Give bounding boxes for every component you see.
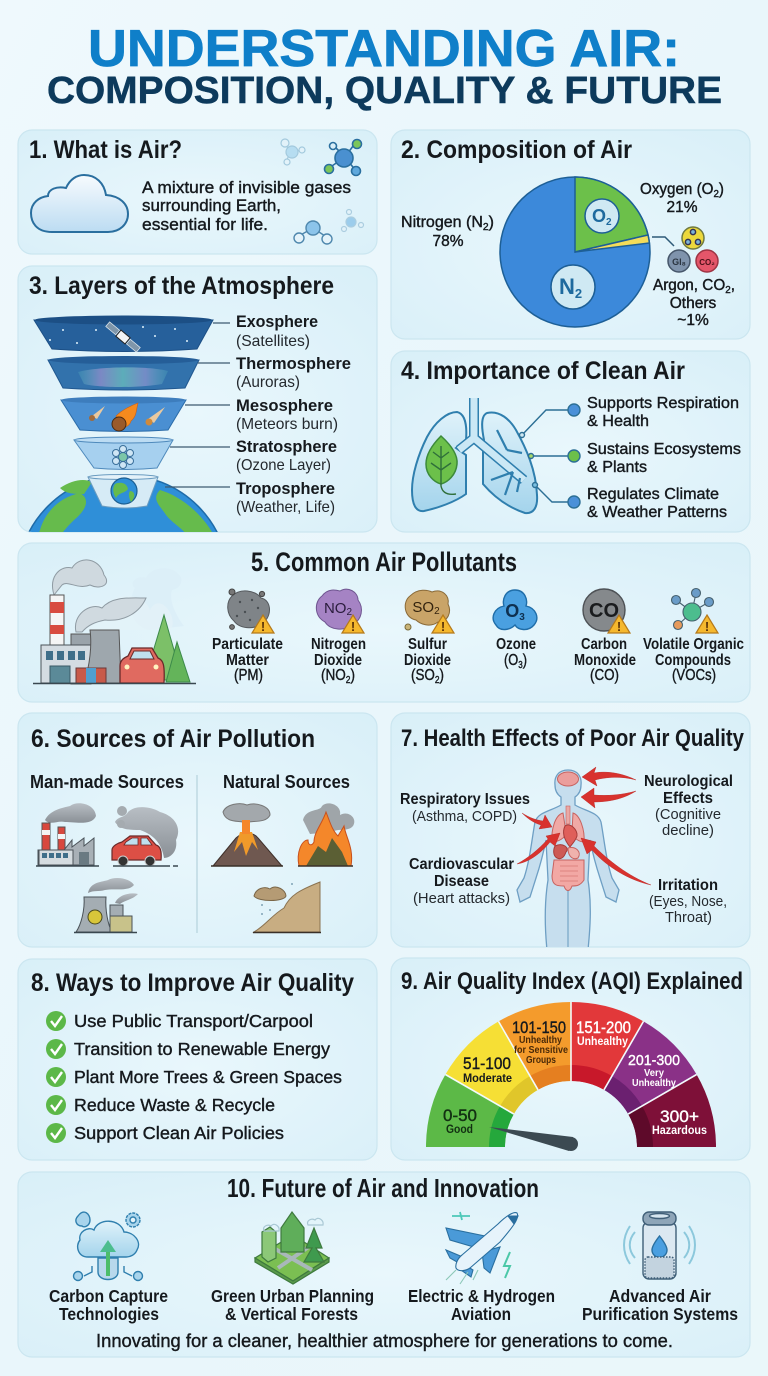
label: ozone: (O [504, 652, 522, 669]
pie chart [500, 177, 650, 327]
label: carbon monoxide: Carbon [581, 636, 627, 653]
icon: wildfire [298, 803, 354, 866]
icon: lungs [412, 398, 537, 513]
gauge label: hazardous [652, 1107, 707, 1137]
list item: public transport: Use Public Transport/Carpool [74, 1011, 313, 1031]
label: carbon capture: Carbon Capture [49, 1286, 168, 1306]
gauge label: sensitive groups [512, 1018, 568, 1066]
icon: power plant [74, 878, 138, 932]
panel: common air pollutants [18, 543, 750, 702]
list: importance items: & Health [587, 413, 649, 430]
label: nitrogen dioxide: 2 [346, 675, 351, 686]
label: ozone [496, 636, 536, 671]
gauge label: sensitive groups: 101-150 [512, 1018, 566, 1037]
icon: nitrogen dioxide: ! [351, 619, 355, 634]
gauge label: good: Good [446, 1122, 473, 1136]
label: neurological effects: Effects [663, 790, 713, 807]
label: sulfur dioxide [404, 636, 451, 686]
icon: carbon monoxide [583, 589, 630, 634]
panel: health effects [391, 713, 750, 950]
label: other gases: Argon, CO [653, 277, 726, 294]
label: cardiovascular disease [409, 856, 514, 907]
label: VOCs: Volatile Organic [643, 636, 744, 653]
icon: ozone: 3 [519, 612, 525, 623]
label: carbon capture: Technologies [59, 1304, 159, 1324]
heading: layers: 3. Layers of the Atmosphere [29, 272, 334, 300]
icon: molecules [281, 139, 364, 244]
gauge label: sensitive groups: Groups [526, 1054, 556, 1066]
label: respiratory issues: (Asthma, COPD) [412, 808, 517, 825]
labels: stratosphere [236, 437, 337, 474]
label: oxygen: Oxygen (O [640, 181, 715, 198]
label: other gases: ~1% [677, 312, 709, 329]
list item: renewable energy: Transition to Renewable Energy [74, 1039, 330, 1059]
label: air purification: Advanced Air [609, 1286, 711, 1306]
label: cardiovascular disease: (Heart attacks) [413, 890, 510, 907]
label: aviation: Aviation [451, 1304, 511, 1324]
list: importance items: Supports Respiration [587, 395, 739, 412]
label: respiratory issues [400, 791, 530, 825]
gauge label: moderate: Moderate [463, 1071, 512, 1085]
labels: thermosphere: Thermosphere [236, 354, 351, 373]
arrows: health effects [517, 767, 651, 885]
text: air definition: A mixture of invisible gases [142, 178, 351, 197]
layer: mesosphere [61, 396, 186, 432]
label: respiratory issues: Respiratory Issues [400, 791, 530, 808]
gauge label: hazardous: Hazardous [652, 1123, 707, 1137]
label: ozone: Ozone [496, 636, 536, 653]
label: particulate matter [212, 636, 283, 684]
label: other gases: 2 [725, 285, 731, 296]
badge: N2: 2 [575, 286, 582, 301]
label: carbon monoxide: (CO) [590, 667, 619, 684]
label: cardiovascular disease: Cardiovascular [409, 856, 514, 873]
heading: sources: 6. Sources of Air Pollution [31, 725, 315, 753]
label: green urban planning: & Vertical Forests [225, 1304, 358, 1324]
label: nitrogen dioxide: Nitrogen [311, 636, 366, 653]
text: air definition: surrounding Earth, [142, 196, 281, 215]
icon: cloud [31, 175, 128, 232]
label: other gases [653, 277, 735, 329]
icon: VOCs [672, 588, 718, 634]
badge: O2: O [592, 206, 606, 226]
label: oxygen: 21% [666, 199, 698, 216]
illustration: human body [517, 770, 619, 950]
label: sulfur dioxide: (SO [411, 667, 439, 684]
icon: ozone: O [505, 601, 519, 621]
label: nitrogen: Nitrogen (N [401, 214, 480, 231]
label: neurological effects [644, 773, 733, 839]
icon: trace gases: Gl₈ [672, 257, 686, 267]
label: nitrogen dioxide: Dioxide [314, 652, 362, 669]
labels: thermosphere: (Auroras) [236, 374, 300, 391]
icon: VOCs: ! [705, 619, 709, 634]
label: neurological effects: Neurological [644, 773, 733, 790]
list: importance items: & Plants [587, 459, 647, 476]
illustration: factory scene [33, 560, 196, 684]
illustration: earth [28, 480, 218, 532]
label: particulate matter: Particulate [212, 636, 283, 653]
title [47, 20, 722, 112]
label: sulfur dioxide: 2 [435, 675, 440, 686]
gauge label: very unhealthy: Unhealthy [632, 1077, 676, 1089]
label: VOCs [643, 636, 744, 684]
subheading: man-made: Man-made Sources [30, 772, 184, 792]
label: irritation: Throat) [665, 909, 712, 926]
title: COMPOSITION, QUALITY & FUTURE [47, 70, 722, 112]
layer: exosphere [34, 316, 213, 353]
gauge label: unhealthy: Unhealthy [577, 1034, 628, 1048]
gauge chart [426, 1002, 716, 1147]
label: ozone: 3 [518, 660, 523, 671]
labels: stratosphere: (Ozone Layer) [236, 457, 331, 474]
panel: importance of clean air [391, 351, 750, 532]
gauge label: sensitive groups: Unhealthy [519, 1034, 562, 1046]
label: nitrogen: 2 [483, 222, 489, 233]
icon: air purifier [624, 1212, 695, 1279]
labels: troposphere [236, 479, 335, 516]
gauge label: very unhealthy: Very [644, 1067, 664, 1079]
label: sulfur dioxide: Dioxide [404, 652, 451, 669]
labels: exosphere: (Satellites) [236, 333, 310, 350]
gauge label: good [443, 1106, 477, 1136]
badge: N2 [551, 265, 595, 309]
list: importance items [587, 395, 741, 521]
label: green urban planning [211, 1286, 374, 1324]
label: air purification [582, 1286, 738, 1324]
list item: clean air policies: Support Clean Air Policies [74, 1123, 284, 1143]
label: aviation [408, 1286, 555, 1324]
label: oxygen: 2 [713, 189, 719, 200]
label: irritation: (Eyes, Nose, [649, 893, 727, 910]
icon: dust landslide [253, 882, 321, 932]
label: carbon monoxide [574, 636, 636, 684]
label: nitrogen dioxide: ) [350, 667, 355, 684]
panel: sources of air pollution [18, 713, 377, 947]
gauge label: unhealthy [576, 1018, 631, 1048]
labels: stratosphere: Stratosphere [236, 437, 337, 456]
icon: carbon monoxide: CO [589, 600, 619, 622]
icon: sulfur dioxide: 2 [434, 606, 440, 617]
heading: what is air: 1. What is Air? [29, 136, 182, 164]
label: oxygen [640, 181, 724, 216]
gauge label: moderate: 51-100 [463, 1054, 511, 1073]
gauge label: very unhealthy [628, 1052, 680, 1089]
label: nitrogen: ) [489, 214, 494, 231]
list item: plant trees: Plant More Trees & Green Spaces [74, 1067, 342, 1087]
label: VOCs: (VOCs) [672, 667, 716, 684]
panel: ways to improve air quality [18, 959, 377, 1160]
label: other gases: Others [670, 295, 717, 312]
label: VOCs: Compounds [655, 652, 731, 669]
labels: troposphere: (Weather, Life) [236, 499, 335, 516]
icon: nitrogen dioxide [316, 589, 364, 634]
badge: O2 [585, 199, 619, 233]
list item: reduce waste: Reduce Waste & Recycle [74, 1095, 275, 1115]
title: UNDERSTANDING AIR: [88, 20, 680, 78]
icon: car with exhaust [112, 806, 178, 866]
label: green urban planning: Green Urban Planning [211, 1286, 374, 1306]
label: particulate matter: Matter [226, 652, 269, 669]
label: nitrogen dioxide: (NO [321, 667, 350, 684]
icon: carbon capture [74, 1212, 142, 1280]
icon: particulate matter [228, 589, 274, 634]
icon: trace gases [652, 227, 718, 272]
gauge label: moderate [463, 1054, 512, 1085]
icon: factory [36, 803, 99, 866]
icon: sulfur dioxide: ! [441, 619, 445, 634]
panel: layers of the atmosphere [18, 265, 378, 533]
leader lines [165, 323, 230, 487]
label: nitrogen dioxide [311, 636, 366, 686]
labels: exosphere: Exosphere [236, 312, 318, 331]
label: nitrogen: 78% [432, 233, 464, 250]
gauge label: good: 0-50 [443, 1106, 477, 1125]
label: particulate matter: (PM) [234, 667, 263, 684]
badge: O2: 2 [606, 217, 612, 228]
icon: green urban planning [255, 1212, 329, 1284]
gauge label: unhealthy: 151-200 [576, 1018, 631, 1037]
label: cardiovascular disease: Disease [434, 873, 489, 890]
text: air definition [142, 178, 351, 234]
icon: trace gases: CO₂ [699, 258, 715, 267]
list: importance items: Sustains Ecosystems [587, 441, 741, 458]
layer: troposphere [88, 474, 158, 508]
icon: carbon monoxide: ! [617, 619, 621, 634]
gauge needle [489, 1127, 578, 1151]
label: oxygen: ) [719, 181, 724, 198]
panel: what is air [18, 130, 377, 254]
label: aviation: Electric & Hydrogen [408, 1286, 555, 1306]
icon: nitrogen dioxide: NO [324, 600, 346, 617]
closing statement: Innovating for a cleaner, healthier atmosphere for generations to come. [96, 1330, 673, 1351]
list: importance items: Regulates Climate [587, 486, 719, 503]
list: importance items: & Weather Patterns [587, 504, 727, 521]
label: air purification: Purification Systems [582, 1304, 738, 1324]
panel: composition of air [391, 130, 750, 339]
labels: mesosphere [236, 396, 338, 433]
labels: thermosphere [236, 354, 351, 391]
heading: future: 10. Future of Air and Innovation [227, 1173, 539, 1203]
heading: importance: 4. Importance of Clean Air [401, 357, 685, 385]
icon: ozone [493, 590, 537, 630]
icon: particulate matter: ! [261, 619, 265, 634]
connectors [520, 404, 580, 508]
icon: volcano [211, 804, 283, 866]
label: carbon capture [49, 1286, 168, 1324]
label: sulfur dioxide: ) [440, 667, 444, 684]
label: nitrogen [401, 214, 494, 250]
badge: N2: N [559, 274, 575, 299]
label: neurological effects: (Cognitive [655, 806, 721, 823]
label: other gases: , [731, 277, 735, 294]
label: ozone: ) [523, 652, 527, 669]
subheading: natural: Natural Sources [223, 772, 350, 792]
icon: aircraft [446, 1212, 518, 1284]
label: irritation [649, 877, 727, 926]
heading: pollutants: 5. Common Air Pollutants [251, 547, 517, 577]
icon: nitrogen dioxide: 2 [346, 607, 352, 618]
layer: thermosphere [48, 356, 199, 390]
label: carbon monoxide: Monoxide [574, 652, 636, 669]
heading: ways to improve: 8. Ways to Improve Air Quality [31, 969, 354, 997]
labels: mesosphere: Mesosphere [236, 396, 333, 415]
label: neurological effects: decline) [662, 822, 714, 839]
panel: air quality index [391, 958, 750, 1160]
labels: exosphere [236, 312, 318, 350]
icon: sulfur dioxide [405, 590, 454, 634]
label: sulfur dioxide: Sulfur [408, 636, 447, 653]
labels: troposphere: Troposphere [236, 479, 335, 498]
label: irritation: Irritation [658, 877, 718, 894]
labels: mesosphere: (Meteors burn) [236, 416, 338, 433]
layer: stratosphere [74, 437, 173, 470]
icon: sulfur dioxide: SO [412, 599, 434, 616]
gauge label: very unhealthy: 201-300 [628, 1052, 680, 1069]
text: air definition: essential for life. [142, 215, 268, 234]
panel: future of air [18, 1172, 750, 1357]
gauge label: hazardous: 300+ [660, 1107, 699, 1126]
gauge label: sensitive groups: for Sensitive [514, 1044, 568, 1056]
heading: composition: 2. Composition of Air [401, 136, 632, 164]
